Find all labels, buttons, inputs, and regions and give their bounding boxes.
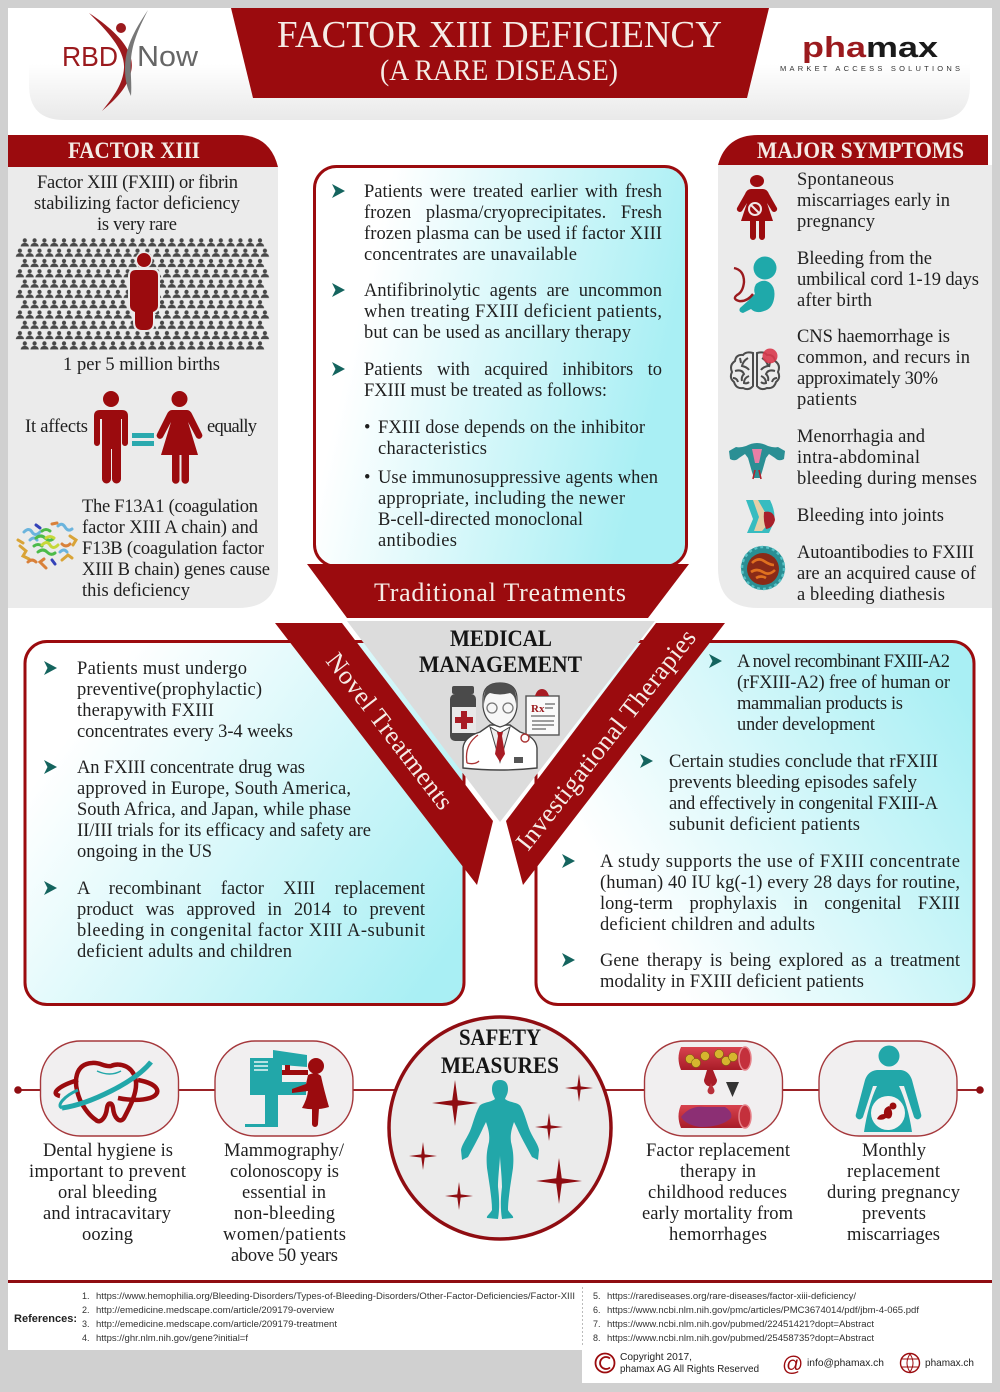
symptom: joint bleeding: Bleeding into joints <box>797 506 944 526</box>
panel: major symptoms: patients <box>797 390 857 410</box>
contact: email: @ <box>782 1353 803 1376</box>
references: 5. <box>593 1291 601 1301</box>
safety: mammography <box>215 1041 353 1266</box>
heading: major symptoms <box>718 135 988 165</box>
symptom: umbilical bleeding: after birth <box>797 291 872 311</box>
panel: major symptoms: common, and recurs in <box>797 348 970 368</box>
text: acquired inhibitors: B-cell-directed monoclonal <box>378 510 583 530</box>
text: monthly replacement: during pregnancy <box>827 1183 961 1203</box>
heading: factor XIII: FACTOR XIII <box>68 138 200 163</box>
references: https://www.ncbi.nlm.nih.gov/pmc/articles/PMC3674014/pdf/jbm-4-065.pdf <box>607 1305 920 1315</box>
logo: RBD Now: RBD <box>62 41 118 72</box>
symptom: autoantibodies <box>741 543 977 605</box>
text: dental hygiene: oozing <box>82 1225 133 1245</box>
references: 3. <box>82 1319 90 1329</box>
text: concentrate approval: An FXIII concentrate drug was <box>77 758 305 778</box>
text: factor replacement: Factor replacement <box>646 1141 791 1161</box>
text: recombinant FXIII-A2 <box>737 652 950 735</box>
text: acquired inhibitors: • <box>364 418 370 438</box>
logo: phamax: MARKET ACCESS SOLUTIONS <box>780 64 960 73</box>
icon: human body <box>461 1080 539 1219</box>
logo: phamax: pha max <box>802 32 938 64</box>
contact: website <box>900 1354 974 1372</box>
text: genes: XIII B chain) genes cause <box>82 560 270 580</box>
panel: novel treatments <box>25 642 464 1004</box>
references: https://rarediseases.org/rare-diseases/factor-xiii-deficiency/ <box>607 1291 857 1301</box>
symptom: menorrhagia <box>729 427 977 489</box>
text: rFXIII studies: prevents bleeding episodes safely <box>669 773 918 793</box>
text: concentrate prophylaxis: deficient children and adults <box>600 915 815 935</box>
symptom: autoantibodies: are an acquired cause of <box>797 564 977 584</box>
text: monthly replacement: prevents <box>862 1204 926 1224</box>
text: concentrate prophylaxis: A study supports the use of FXIII concentrate <box>600 852 960 872</box>
text: definition <box>34 173 241 235</box>
text: plasma treatment: Patients were treated earlier with fresh <box>364 182 662 202</box>
banner: traditional treatments <box>307 564 689 618</box>
text: mammography <box>223 1141 346 1266</box>
banner: investigational therapies: Investigational Therapies <box>510 624 702 856</box>
references: References: <box>14 1313 77 1325</box>
text: prophylactic therapy: therapywith FXIII <box>77 701 214 721</box>
safety measures circle <box>389 1017 611 1239</box>
text: factor replacement: therapy in <box>680 1162 756 1182</box>
text: concentrate prophylaxis: long-term prophylaxis in congenital FXIII <box>600 894 960 914</box>
text: recombinant product: A recombinant factor XIII replacement <box>77 879 425 899</box>
icon: crowd with one affected person <box>15 238 270 351</box>
symptom: menorrhagia: intra-abdominal <box>797 448 920 468</box>
contact: email <box>782 1353 884 1376</box>
references: https://ghr.nlm.nih.gov/gene?initial=f <box>96 1333 249 1343</box>
text: acquired inhibitors: FXIII must be treated as follows: <box>364 381 607 401</box>
text: prophylactic therapy: preventive(prophylactic) <box>77 680 262 700</box>
banner: novel treatments <box>275 623 493 885</box>
affects men and women equally <box>25 391 258 484</box>
heading: medical management: MANAGEMENT <box>419 652 582 677</box>
text: gene therapy: Gene therapy is being explored as a treatment <box>600 951 960 971</box>
text: genes: F13B (coagulation factor <box>82 539 264 559</box>
text: rFXIII studies: Certain studies conclude that rFXIII <box>669 752 938 772</box>
symptom: menorrhagia: Menorrhagia and <box>797 427 926 447</box>
icon: protein structure <box>18 523 76 568</box>
text: acquired inhibitors: antibodies <box>378 531 457 551</box>
text: definition: is very rare <box>97 215 177 235</box>
text: dental hygiene: and intracavitary <box>43 1204 172 1224</box>
text: mammography: colonoscopy is <box>230 1162 339 1182</box>
panel: traditional treatments <box>314 166 686 566</box>
symptom: autoantibodies: a bleeding diathesis <box>797 585 945 605</box>
text: dental hygiene: important to prevent <box>29 1162 187 1182</box>
sparkle stars <box>409 1074 593 1210</box>
logo: RBD Now <box>62 10 199 111</box>
text: concentrate approval: ongoing in the US <box>77 842 212 862</box>
panel: major symptoms <box>718 135 992 608</box>
bullet arrows <box>562 654 722 967</box>
text: factor replacement: early mortality from <box>642 1204 794 1224</box>
text: gene therapy <box>600 951 960 992</box>
bullet arrows <box>44 661 57 895</box>
text: monthly replacement <box>827 1141 961 1245</box>
text: factor replacement: childhood reduces <box>648 1183 787 1203</box>
references: https://www.hemophilia.org/Bleeding-Disorders/Types-of-Bleeding-Disorders/Other-Factor-Deficiencies/Factor-XIII <box>96 1291 575 1301</box>
references: 2. <box>82 1305 90 1315</box>
text: prophylactic therapy: concentrates every 3-4 weeks <box>77 722 293 742</box>
symptom: brain haemorrhage <box>731 348 779 389</box>
text: mammography: Mammography/ <box>224 1141 345 1161</box>
affects men and women equally: equally <box>207 417 258 437</box>
text: acquired inhibitors: appropriate, including the newer <box>378 489 625 509</box>
text: antifibrinolytic agents: when treating FXIII deficient patients, <box>364 302 662 322</box>
text: prophylactic therapy <box>77 659 293 742</box>
references: 4. <box>82 1333 90 1343</box>
icon: doctor with medicine and prescription <box>450 683 559 770</box>
text: monthly replacement: miscarriages <box>847 1225 940 1245</box>
text: recombinant product: bleeding in congenital factor XIII A-subunit <box>77 921 426 941</box>
affects men and women equally: It affects <box>25 417 88 437</box>
references: 8. <box>593 1333 601 1343</box>
text: acquired inhibitors: • <box>364 468 370 488</box>
icon: pregnant woman <box>856 1046 921 1132</box>
text: recombinant FXIII-A2: A novel recombinant FXIII-A2 <box>737 652 950 672</box>
text: definition: stabilizing factor deficiency <box>34 194 241 214</box>
references: 7. <box>593 1319 601 1329</box>
text: genes: this deficiency <box>82 581 191 601</box>
text: concentrate approval: II/III trials for its efficacy and safety are <box>77 821 371 841</box>
text: concentrate approval: approved in Europe, South America, <box>77 779 351 799</box>
text: concentrate prophylaxis <box>600 852 960 935</box>
text: concentrate approval: South Africa, and Japan, while phase <box>77 800 351 820</box>
text: gene therapy: modality in FXIII deficient patients <box>600 972 864 992</box>
heading: safety measures: MEASURES <box>441 1053 559 1078</box>
icon: doctor with medicine and prescription: Rx <box>531 703 545 715</box>
symptom: miscarriage <box>737 170 950 240</box>
text: plasma treatment: frozen plasma/cryoprecipitates. Fresh <box>364 203 662 223</box>
text: genes: The F13A1 (coagulation <box>82 497 258 517</box>
icon: copyright <box>596 1354 614 1372</box>
text: mammography: women/patients <box>223 1225 346 1245</box>
text: definition: Factor XIII (FXIII) or fibrin <box>37 173 238 193</box>
text: plasma treatment <box>364 182 662 265</box>
references: 1. <box>82 1291 90 1301</box>
safety: factor replacement <box>642 1041 794 1245</box>
text: recombinant FXIII-A2: (rFXIII-A2) free of human or <box>737 673 950 693</box>
icon: tooth <box>56 1062 157 1121</box>
safety: dental hygiene <box>29 1041 187 1245</box>
text: copyright: phamax AG All Rights Reserved <box>620 1363 759 1375</box>
symptom: joint bleeding <box>746 500 944 533</box>
references: http://emedicine.medscape.com/article/209179-overview <box>96 1305 335 1315</box>
heading: safety measures <box>441 1025 559 1078</box>
text: rFXIII studies: and effectively in congenital FXIII-A <box>669 794 939 814</box>
symptom: miscarriage: miscarriages early in <box>797 191 950 211</box>
panel: major symptoms: approximately 30% <box>797 369 938 389</box>
text: mammography: above 50 years <box>231 1246 338 1266</box>
text: acquired inhibitors: Patients with acquired inhibitors to <box>364 360 662 380</box>
text: copyright: Copyright 2017, <box>620 1351 692 1363</box>
text: copyright <box>620 1351 759 1375</box>
symptom: autoantibodies: Autoantibodies to FXIII <box>797 543 974 563</box>
footer: copyright and contact <box>596 1351 974 1376</box>
symptom: umbilical bleeding: umbilical cord 1-19 days <box>797 270 979 290</box>
text: dental hygiene: Dental hygiene is <box>43 1141 173 1161</box>
logo: RBD Now: Now <box>137 41 199 73</box>
text: genes <box>82 497 270 601</box>
text: rFXIII studies <box>669 752 939 835</box>
title banner <box>231 8 769 98</box>
icon: mammography machine <box>245 1050 329 1127</box>
text: plasma treatment: concentrates are unavailable <box>364 245 577 265</box>
title banner: (A RARE DISEASE) <box>380 54 618 87</box>
heading: medical management: MEDICAL <box>450 626 552 651</box>
references: http://emedicine.medscape.com/article/209179-treatment <box>96 1319 338 1329</box>
heading: factor XIII <box>8 135 278 167</box>
title banner: FACTOR XIII DEFICIENCY <box>277 14 722 56</box>
heading: major symptoms: MAJOR SYMPTOMS <box>757 138 964 163</box>
text: rFXIII studies: subunit deficient patients <box>669 815 860 835</box>
symptom: umbilical bleeding: Bleeding from the <box>797 249 932 269</box>
banner: traditional treatments: Traditional Treatments <box>374 578 626 607</box>
references <box>8 1280 992 1346</box>
text: recombinant product <box>77 879 426 962</box>
text: concentrate prophylaxis: (human) 40 IU kg(-1) every 28 days for routine, <box>600 873 960 893</box>
text: monthly replacement: replacement <box>847 1162 941 1182</box>
text: dental hygiene: oral bleeding <box>58 1183 157 1203</box>
text: recombinant FXIII-A2: mammalian products is <box>737 694 903 714</box>
references: https://www.ncbi.nlm.nih.gov/pubmed/25458735?dopt=Abstract <box>607 1333 875 1343</box>
text: factor replacement: hemorrhages <box>669 1225 767 1245</box>
text: plasma treatment: frozen plasma can be used if factor XIII <box>364 224 662 244</box>
text: monthly replacement: Monthly <box>862 1141 927 1161</box>
panel: investigational therapies <box>536 642 974 1004</box>
contact: website: phamax.ch <box>925 1357 974 1369</box>
text: acquired inhibitors: characteristics <box>378 439 487 459</box>
header band <box>29 8 970 120</box>
text: concentrate approval <box>77 758 371 862</box>
text: genes: factor XIII A chain) and <box>82 518 259 538</box>
symptom: miscarriage: pregnancy <box>797 212 876 232</box>
text: acquired inhibitors: FXIII dose depends on the inhibitor <box>378 418 645 438</box>
symptom: menorrhagia: bleeding during menses <box>797 469 977 489</box>
references: https://www.ncbi.nlm.nih.gov/pubmed/22451421?dopt=Abstract <box>607 1319 875 1329</box>
logo: phamax <box>780 32 960 73</box>
text: mammography: non-bleeding <box>234 1204 335 1224</box>
text: acquired inhibitors: Use immunosuppressive agents when <box>378 468 658 488</box>
timeline connector <box>14 1086 984 1094</box>
text: recombinant product: deficient adults and children <box>77 942 292 962</box>
contact: email: info@phamax.ch <box>807 1357 884 1369</box>
references: 6. <box>593 1305 601 1315</box>
panel: factor XIII <box>8 135 278 608</box>
text: antifibrinolytic agents <box>364 281 662 343</box>
text: prevalence: 1 per 5 million births <box>63 355 220 375</box>
text: prophylactic therapy: Patients must undergo <box>77 659 247 679</box>
text: mammography: essential in <box>242 1183 326 1203</box>
heading: medical management <box>419 626 582 677</box>
heading: safety measures: SAFETY <box>459 1025 541 1050</box>
banner: novel treatments: Novel Treatments <box>320 647 459 815</box>
symptom: umbilical bleeding <box>734 249 979 313</box>
panel: major symptoms: CNS haemorrhage is <box>797 327 950 347</box>
text: acquired inhibitors <box>364 360 662 551</box>
text: recombinant FXIII-A2: under development <box>737 715 876 735</box>
text: recombinant product: product was approved in 2014 to prevent <box>77 900 425 920</box>
text: dental hygiene <box>29 1141 187 1245</box>
text: factor replacement <box>642 1141 794 1245</box>
icon: blood vessels <box>678 1047 751 1128</box>
symptom: miscarriage: Spontaneous <box>797 170 894 190</box>
center triangle: medical management <box>347 621 655 822</box>
bullet arrows <box>332 184 345 376</box>
safety: monthly replacement <box>819 1041 961 1245</box>
text: antifibrinolytic agents: Antifibrinolytic agents are uncommon <box>364 281 662 301</box>
text: antifibrinolytic agents: but can be used as ancillary therapy <box>364 323 632 343</box>
